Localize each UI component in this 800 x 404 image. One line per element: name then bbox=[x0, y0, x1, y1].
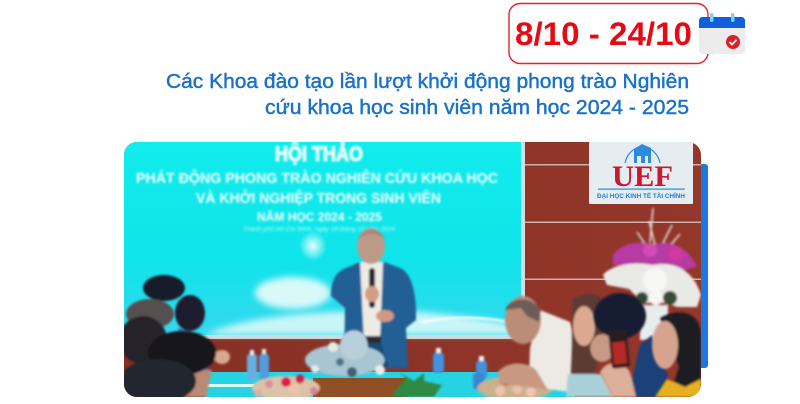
woman looking down bbox=[566, 294, 614, 397]
heading bbox=[166, 71, 689, 119]
UEF sign bbox=[589, 142, 693, 204]
wood wall bbox=[124, 142, 701, 397]
table bbox=[205, 372, 575, 397]
date badge bbox=[509, 4, 708, 64]
second table bouquet bbox=[476, 376, 554, 397]
screen title text: HỘI THẢO bbox=[275, 142, 363, 166]
water bottles bbox=[247, 348, 487, 389]
infographic canvas bbox=[124, 2, 745, 397]
man with phone bbox=[590, 293, 668, 397]
icon: calendar with check bbox=[699, 13, 745, 54]
screen title text: VÀ KHỞI NGHIỆP TRONG SINH VIÊN bbox=[196, 189, 441, 207]
UEF sign: ĐẠI HỌC KINH TẾ TÀI CHÍNH bbox=[597, 190, 685, 200]
woman right bbox=[652, 312, 701, 397]
speaker bbox=[331, 228, 416, 368]
podium flowers bbox=[305, 330, 385, 377]
man seated bbox=[496, 294, 574, 393]
table bouquet bbox=[252, 374, 320, 400]
photo: seminar scene bbox=[119, 142, 701, 403]
screen title text: Thành phố Hồ Chí Minh, ngày 18 tháng 10 năm 2024 bbox=[243, 226, 396, 233]
screen title text: NĂM HỌC 2024 - 2025 bbox=[257, 211, 383, 224]
screen title text bbox=[136, 142, 498, 233]
UEF sign: UEF bbox=[612, 160, 673, 193]
blue accent bar behind photo bbox=[690, 164, 708, 368]
orchid arrangement bbox=[603, 208, 701, 340]
screen title text: PHÁT ĐỘNG PHONG TRÀO NGHIÊN CỨU KHOA HỌC bbox=[136, 169, 498, 187]
heading: cứu khoa học sinh viên năm học 2024 - 2025 bbox=[265, 97, 689, 119]
plant bbox=[392, 373, 442, 397]
podium bbox=[313, 378, 407, 397]
date range text: 8/10 - 24/10 bbox=[515, 16, 692, 52]
projection screen bbox=[124, 142, 525, 339]
audience left bbox=[119, 275, 230, 403]
heading: Các Khoa đào tạo lần lượt khởi động phong trào Nghiên bbox=[166, 71, 689, 93]
